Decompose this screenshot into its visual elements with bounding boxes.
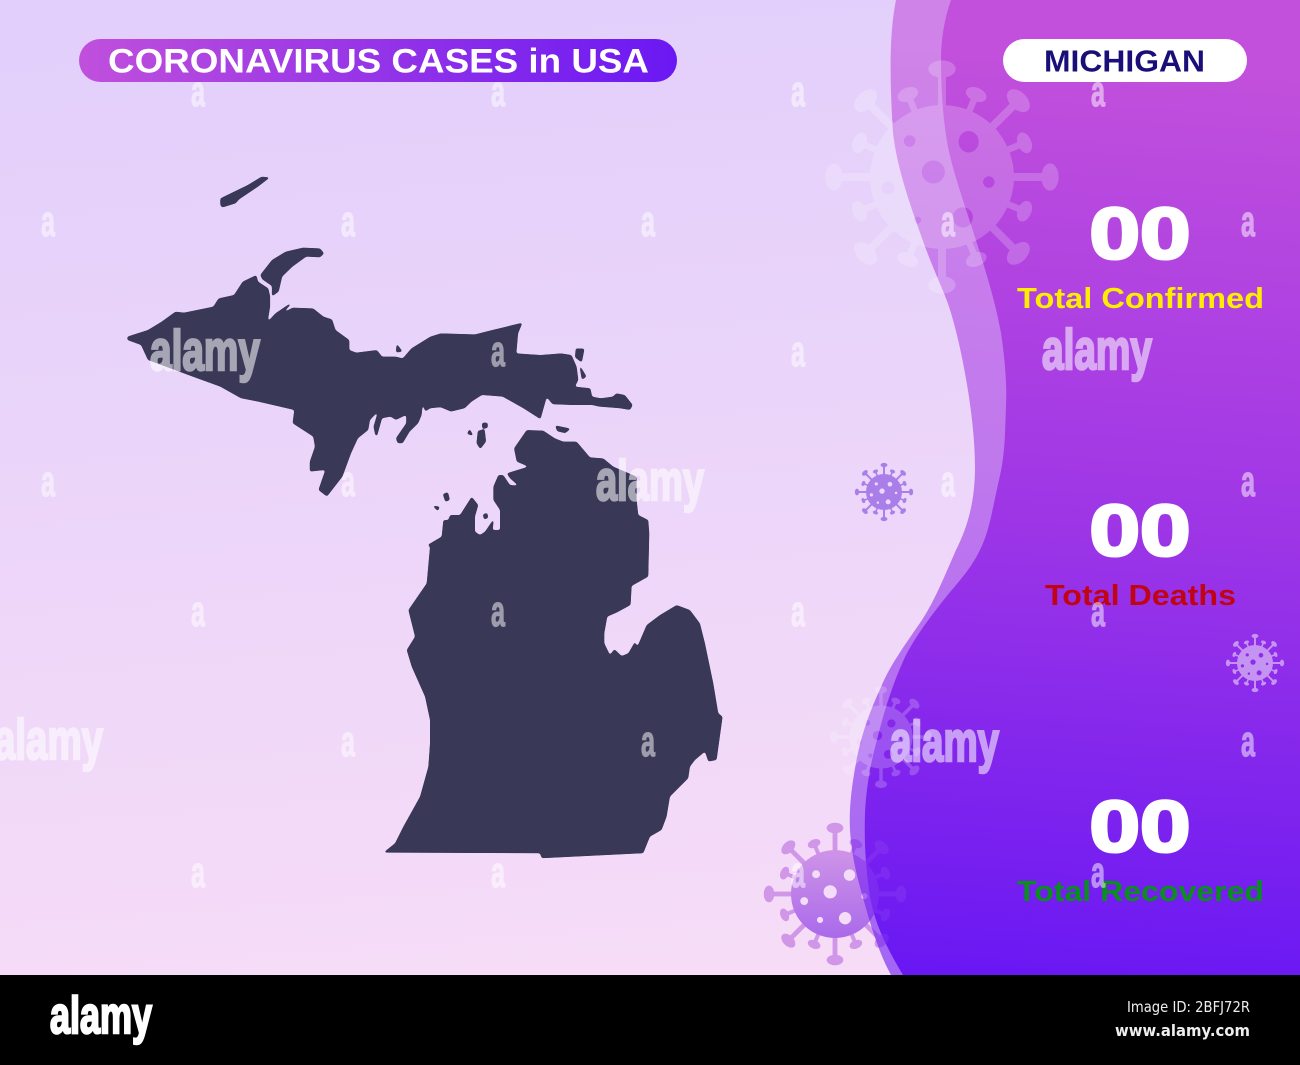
title text: CORONAVIRUS CASES in USA (108, 42, 649, 80)
state name: MICHIGAN (1044, 44, 1205, 78)
watermark: repeated small marks: a (791, 327, 805, 376)
watermark: repeated small marks: a (1241, 717, 1255, 766)
map: Isle Royale (220, 177, 270, 208)
watermark: repeated small marks: a (341, 457, 355, 506)
watermark: repeated small marks: a (41, 457, 55, 506)
watermark: repeated small marks: a (1091, 848, 1105, 897)
watermark: repeated small marks: a (341, 717, 355, 766)
watermark: repeated small marks: a (491, 587, 505, 636)
state pill (1003, 39, 1247, 82)
icon: large virus bottom (764, 823, 906, 965)
icon: small virus left (855, 463, 913, 521)
watermark: repeated small marks: a (1241, 457, 1255, 506)
watermark: repeated small marks: a (791, 67, 805, 116)
confirmed number: 00 (1090, 194, 1190, 274)
map: Keweenaw (260, 248, 324, 297)
icon: medium virus (830, 686, 932, 788)
confirmed label: Total Confirmed (1017, 283, 1264, 315)
footer bar (0, 975, 1300, 1065)
recovered label: Total Recovered (1017, 876, 1264, 908)
deaths number: 00 (1090, 492, 1190, 572)
watermark: repeated small marks: a (791, 848, 805, 897)
icon: small virus right (1226, 634, 1284, 692)
panel: right gradient panel (865, 0, 1300, 975)
watermark: repeated small marks: a (491, 327, 505, 376)
icon: faint virus overlap in panel (866, 840, 906, 944)
watermark: repeated small marks: a (341, 197, 355, 246)
deaths label: Total Deaths (1045, 580, 1236, 612)
watermark: large marks: alamy (596, 449, 704, 513)
watermark: repeated small marks: a (1241, 197, 1255, 246)
watermark: repeated small marks: a (41, 197, 55, 246)
map: Lower Peninsula (383, 430, 723, 858)
stat: total deaths (1045, 492, 1236, 612)
map: northern islands (396, 343, 587, 449)
footer logo: alamy (50, 987, 152, 1045)
map: Michigan (127, 177, 723, 858)
icon: large translucent virus top (825, 60, 1059, 294)
watermark: repeated small marks: a (1091, 587, 1105, 636)
footer url: www.alamy.com (1115, 1021, 1250, 1040)
watermark: repeated small marks (41, 67, 1255, 897)
watermark: large marks: alamy (890, 710, 999, 774)
map: Upper Peninsula (127, 275, 633, 497)
watermark: repeated small marks: a (191, 67, 205, 116)
recovered number: 00 (1090, 788, 1190, 868)
watermark: repeated small marks: a (791, 587, 805, 636)
watermark: repeated small marks: a (491, 848, 505, 897)
watermark: repeated small marks: a (641, 717, 655, 766)
map: Leelanau islands (432, 492, 488, 520)
stat: total recovered (1017, 788, 1264, 908)
watermark: repeated small marks: a (1091, 67, 1105, 116)
stat: total confirmed (1017, 194, 1264, 315)
watermark: repeated small marks: a (191, 587, 205, 636)
watermark: repeated small marks: a (641, 197, 655, 246)
footer image id: Image ID: 2BFJ72R (1127, 998, 1250, 1016)
watermark: large marks: alamy (1042, 318, 1152, 382)
watermark: repeated small marks: a (941, 457, 955, 506)
title pill (79, 39, 677, 82)
watermark: repeated small marks: a (941, 197, 955, 246)
watermark: large marks (0, 318, 1152, 774)
watermark: repeated small marks: a (491, 67, 505, 116)
watermark: repeated small marks: a (191, 848, 205, 897)
wave: translucent band (850, 0, 1300, 975)
watermark: large marks: alamy (150, 319, 260, 383)
